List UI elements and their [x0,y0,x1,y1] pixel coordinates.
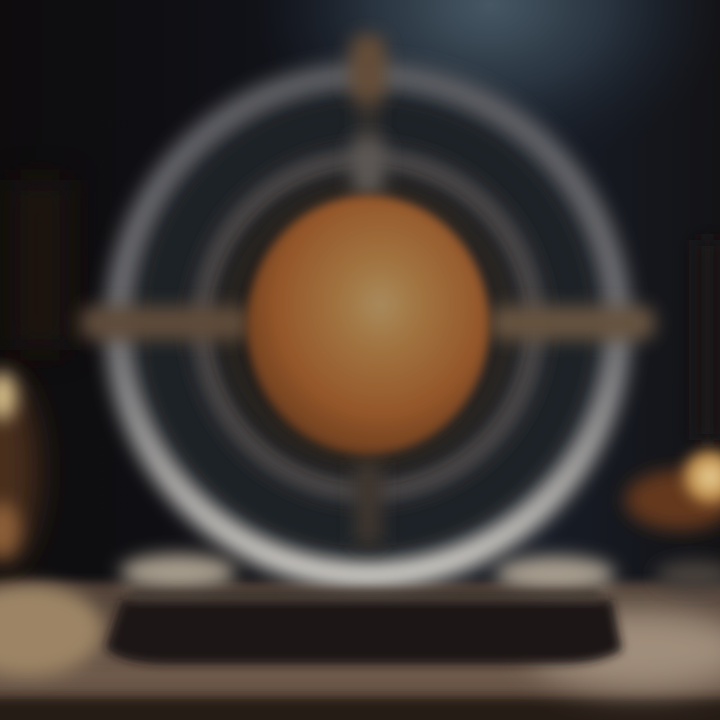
stand base [106,554,622,664]
left glowing object [0,372,38,565]
central orange disc [246,195,490,455]
outer ring [118,75,618,575]
middle ring [203,160,533,490]
instrument rings [118,75,618,575]
horizontal bar [80,306,655,340]
inner dark ring [230,187,506,463]
table surface [0,582,720,720]
right glowing lamp [625,441,720,589]
vertical bar and top finial [350,34,386,545]
dark gap ring [163,120,573,530]
